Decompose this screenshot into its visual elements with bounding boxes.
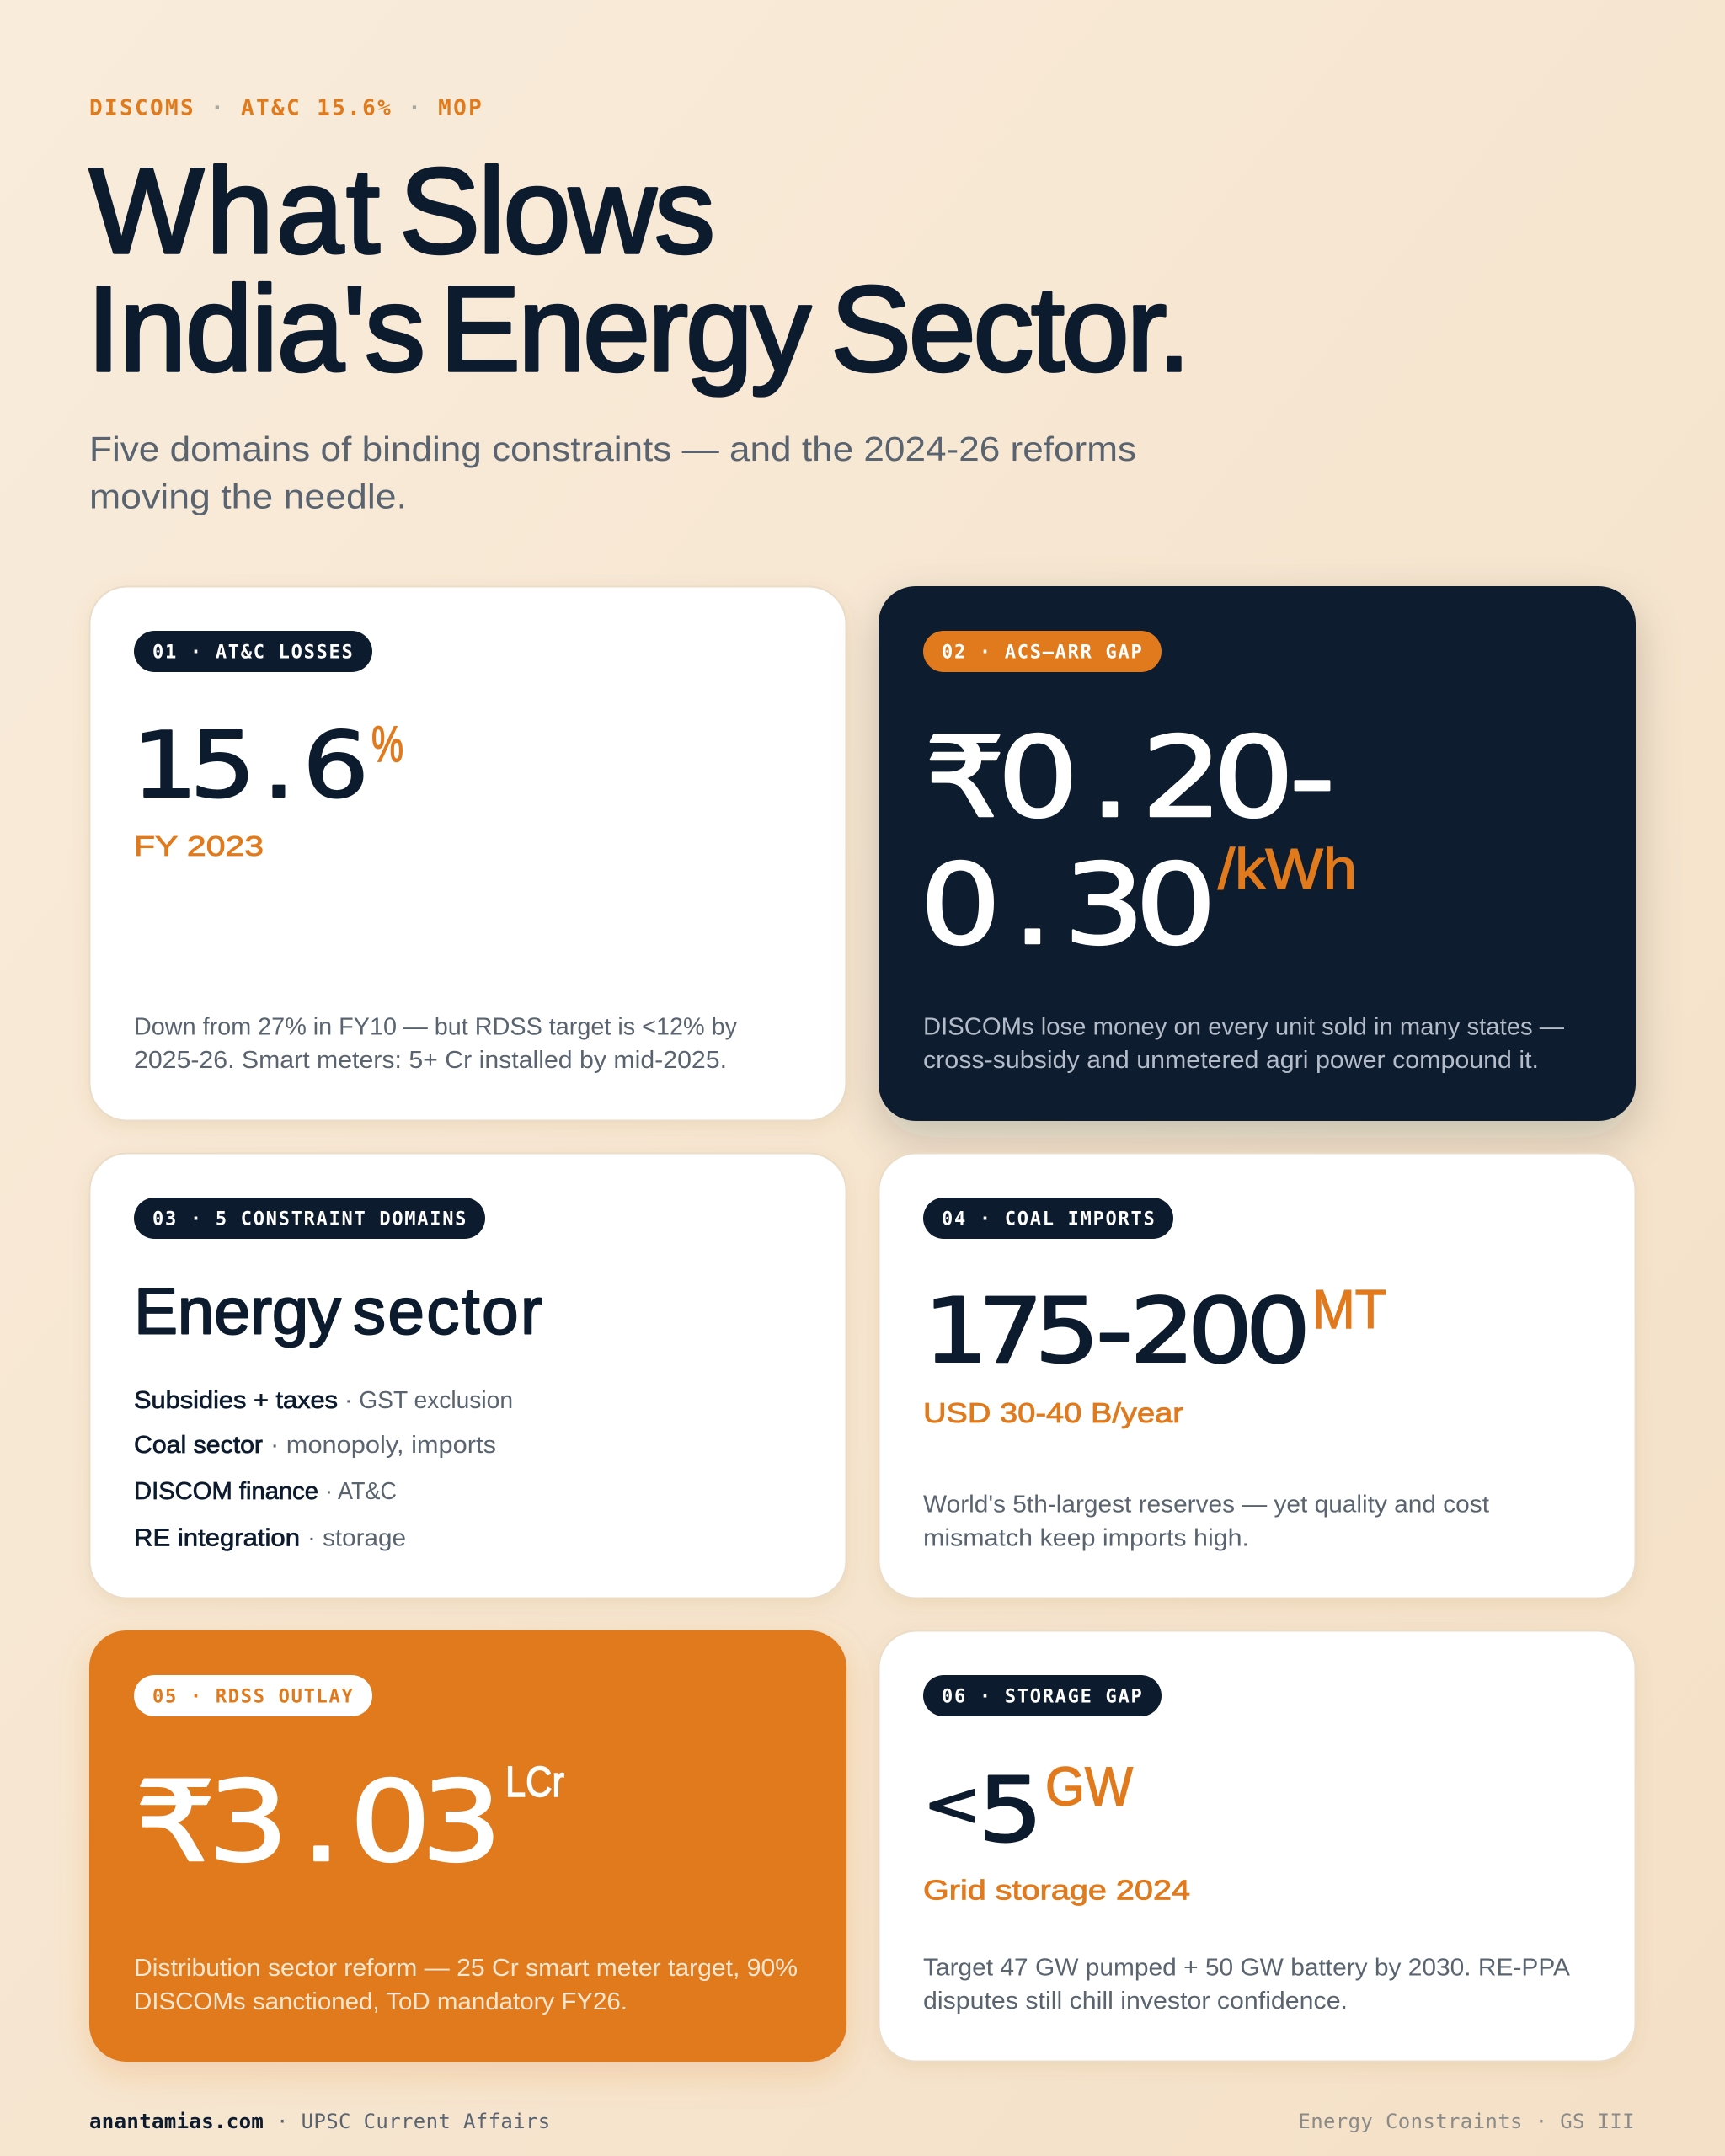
stat: rupee 0.20-0.30 per kWh: 0.30 [920,841,1216,970]
stat caption: USD 30-40 B/year [923,1397,1183,1428]
footer: topic: Energy Constraints · GS III [1298,2110,1635,2133]
title: Slows [399,143,715,279]
stat: <5 GW: < [923,1769,981,1840]
tag: 02 ACS-ARR gap [923,631,1162,672]
description: disputes still chill investor confidence. [923,1988,1348,2015]
domain list: · storage [307,1524,406,1551]
tag: 04 coal imports: 04 · COAL IMPORTS [942,1209,1156,1230]
panel: constraint domains [89,1154,846,1598]
panel: coal imports [879,1154,1636,1598]
description: Down from 27% in FY10 — but RDSS target is <12% by [134,1014,737,1041]
description [923,1954,1571,2015]
eyebrow: DISCOMS · AT&C 15.6% · MOP [89,96,483,121]
description: World's 5th-largest reserves — yet quality and cost [923,1491,1489,1518]
heading: Energy sector: Energy [134,1273,341,1348]
stat: rupee 3.03 LCr: ₹3.03 [135,1758,502,1887]
description: 2025-26. Smart meters: 5+ Cr installed by mid-2025. [134,1047,727,1074]
description [134,1955,798,2015]
subtitle: moving the needle. [89,477,407,515]
tag: 01 AT&C losses: 01 · AT&C LOSSES [152,642,354,664]
tag: 06 storage gap: 06 · STORAGE GAP [942,1686,1143,1708]
description [923,1491,1489,1551]
subtitle: Five domains of binding constraints — and the 2024-26 reforms [89,430,1136,468]
panel: ACS-ARR gap [879,586,1636,1121]
tag: 05 RDSS outlay: 05 · RDSS OUTLAY [152,1686,354,1708]
stat: rupee 3.03 LCr: LCr [505,1758,564,1806]
domain list: · monopoly, imports [270,1432,496,1459]
tag: 05 RDSS outlay [134,1675,372,1716]
description: DISCOMs lose money on every unit sold in many states — [923,1014,1564,1041]
panel: AT&C losses [89,586,846,1120]
tag: 06 storage gap [923,1675,1162,1716]
stat: 175-200 MT: 175-200 [923,1279,1311,1383]
stat caption: FY 2023 [134,830,264,862]
stat: <5 GW [923,1755,1134,1862]
domain list: Coal sector [134,1432,263,1459]
description [923,1014,1564,1074]
stat: rupee 0.20-0.30 per kWh: /kWh [1218,837,1357,901]
title: India's [87,261,425,397]
tag: 03 constraint domains: 03 · 5 CONSTRAINT DOMAINS [152,1209,467,1230]
domain list: RE integration [134,1524,300,1551]
description: mismatch keep imports high. [923,1524,1249,1551]
tag: 02 ACS-ARR gap: 02 · ACS–ARR GAP [942,642,1143,664]
domain list: · AT&C [325,1478,397,1505]
description: cross-subsidy and unmetered agri power compound it. [923,1047,1539,1074]
description: Target 47 GW pumped + 50 GW battery by 2030. RE-PPA [923,1954,1571,1981]
title: Energy [440,261,811,397]
panel: storage gap [879,1630,1636,2062]
title: Sector. [830,261,1191,397]
stat caption: Grid storage 2024 [923,1875,1190,1905]
title [87,143,1191,397]
tag: 03 constraint domains [134,1198,485,1239]
panel: RDSS outlay [89,1630,846,2062]
stat: <5 GW: 5 [978,1758,1043,1862]
stat: rupee 0.20-0.30 per kWh [920,713,1357,970]
domain list: Subsidies + taxes [134,1387,338,1414]
heading: Energy sector: sector [353,1273,542,1348]
tag: 04 coal imports [923,1198,1173,1239]
stat: <5 GW: GW [1045,1755,1134,1817]
domain list: DISCOM finance [134,1478,318,1505]
description [134,1014,737,1074]
stat: 175-200 MT: MT [1312,1278,1386,1340]
domain list [134,1387,513,1551]
subtitle [89,430,1136,515]
domain list: · GST exclusion [344,1387,513,1414]
heading: Energy sector [134,1273,542,1348]
tag: 01 AT&C losses [134,631,372,672]
stat: rupee 0.20-0.30 per kWh: ₹0.20- [924,713,1335,843]
stat: 15.6%: % [371,716,403,772]
description: Distribution sector reform — 25 Cr smart meter target, 90% [134,1955,798,1982]
title: What [89,143,380,279]
description: DISCOMs sanctioned, ToD mandatory FY26. [134,1988,628,2015]
footer: source: anantamias.com · UPSC Current Affairs [89,2110,551,2133]
stat: 15.6%: 15.6 [131,713,369,819]
